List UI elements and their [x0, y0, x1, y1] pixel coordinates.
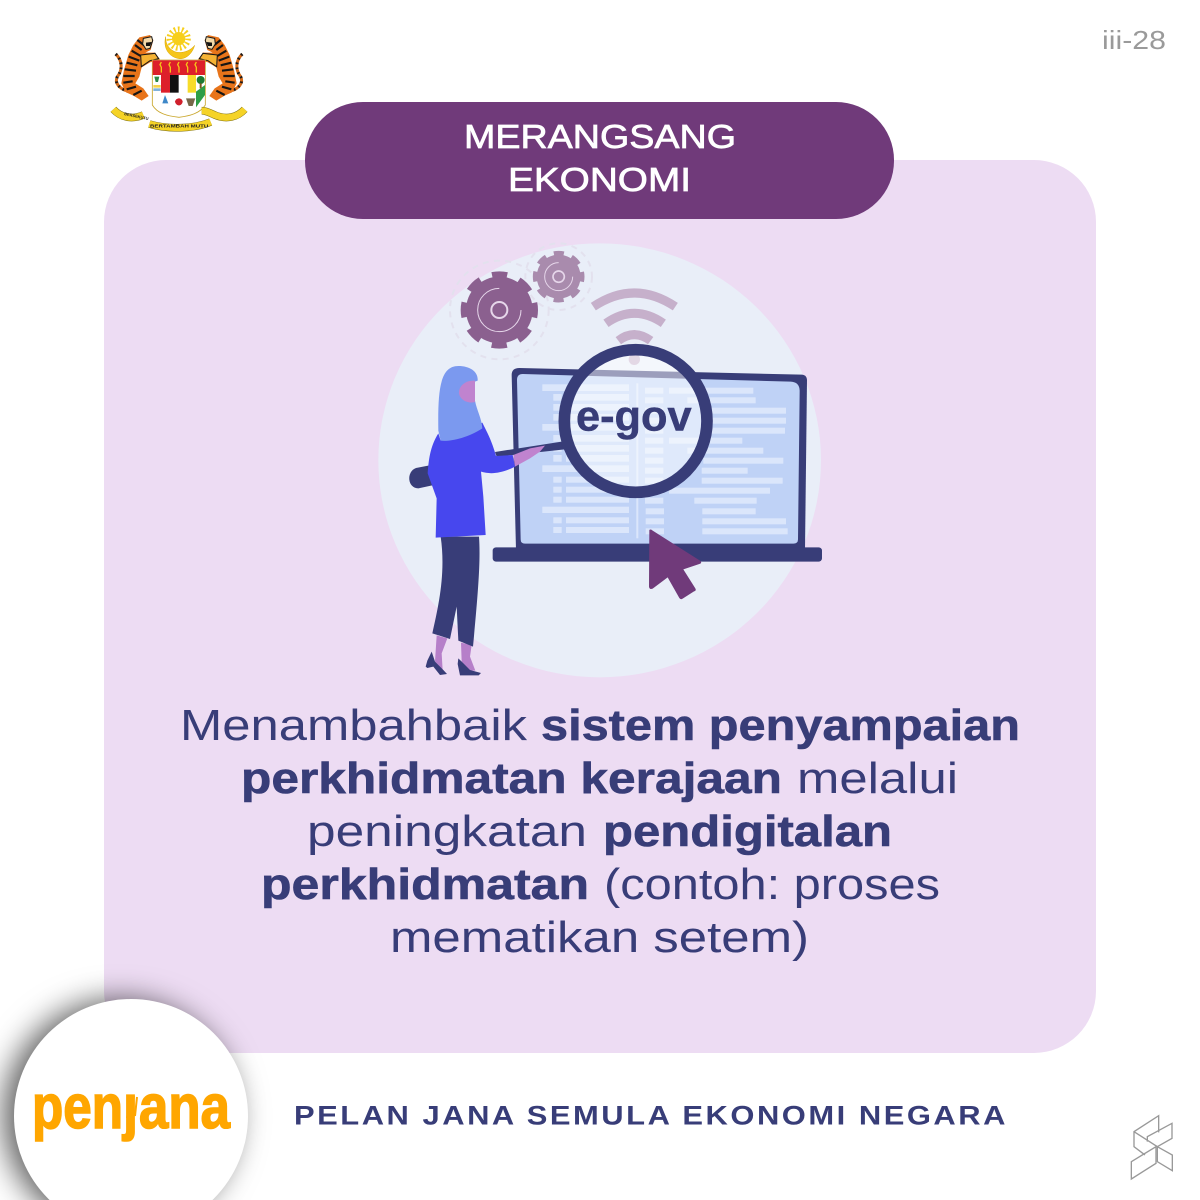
body text: Menambahbaik — [180, 701, 528, 750]
torso — [428, 423, 515, 538]
footer tagline: PELAN JANA SEMULA EKONOMI NEGARA — [294, 1100, 1008, 1130]
magnifier handle — [495, 441, 565, 457]
body text: peningkatan — [307, 807, 587, 856]
shield — [152, 60, 205, 117]
right tiger — [198, 35, 242, 101]
laptop screen frame — [512, 368, 807, 550]
panel: main lilac card — [104, 160, 1096, 1053]
logo: penjana wordmark: pen — [32, 1073, 123, 1142]
heading: Merangsang Ekonomi: MERANGSANG — [464, 118, 736, 155]
logo: penjana wordmark: ana — [139, 1073, 230, 1142]
icon: Malaysian coat of arms — [113, 29, 245, 128]
hijab — [438, 366, 482, 441]
background circle — [378, 243, 821, 677]
shoes — [426, 652, 447, 675]
icon: publisher mark — [1131, 1116, 1172, 1179]
body text: melalui — [797, 754, 958, 803]
logo: penjana wordmark: j — [122, 1073, 138, 1142]
back arm — [409, 462, 448, 488]
motto ribbon: BERSEKUTU — [124, 111, 149, 121]
gear orbits — [450, 243, 592, 359]
cursor arrow — [649, 529, 701, 599]
body text — [180, 701, 1020, 962]
logo badge: white circle with shadow — [14, 999, 248, 1200]
body text: perkhidmatan kerajaan — [241, 754, 782, 803]
laptop — [493, 368, 822, 562]
ankles — [435, 635, 447, 671]
face — [459, 381, 475, 403]
body text: (contoh: proses — [604, 860, 940, 909]
body text: sistem penyampaian — [541, 701, 1020, 750]
code lines — [542, 383, 788, 538]
illustration: e-gov laptop with woman and magnifier — [378, 243, 822, 677]
heading pill background — [305, 102, 894, 219]
magnifier lens — [564, 350, 707, 492]
icon: large gear — [464, 275, 534, 345]
e-gov label: e-gov — [576, 393, 692, 441]
laptop base — [493, 547, 822, 562]
left tiger — [116, 35, 160, 101]
trousers — [432, 537, 480, 647]
crescent and sun — [165, 29, 195, 59]
motto ribbon: BERTAMBAH MUTU — [150, 123, 208, 128]
motto ribbon — [113, 109, 245, 128]
page number: iii-28 — [1102, 25, 1166, 55]
body text: mematikan setem) — [390, 913, 809, 962]
laptop screen — [517, 374, 800, 544]
body text: perkhidmatan — [261, 860, 589, 909]
woman figure — [409, 366, 545, 675]
icon: small gear — [535, 253, 582, 300]
hand — [513, 446, 545, 467]
body text: pendigitalan — [603, 807, 892, 856]
logo: penjana wordmark — [32, 1073, 230, 1142]
heading: Merangsang Ekonomi: EKONOMI — [508, 161, 691, 198]
heading: Merangsang Ekonomi — [464, 118, 736, 198]
icon: wifi signal — [593, 293, 675, 365]
